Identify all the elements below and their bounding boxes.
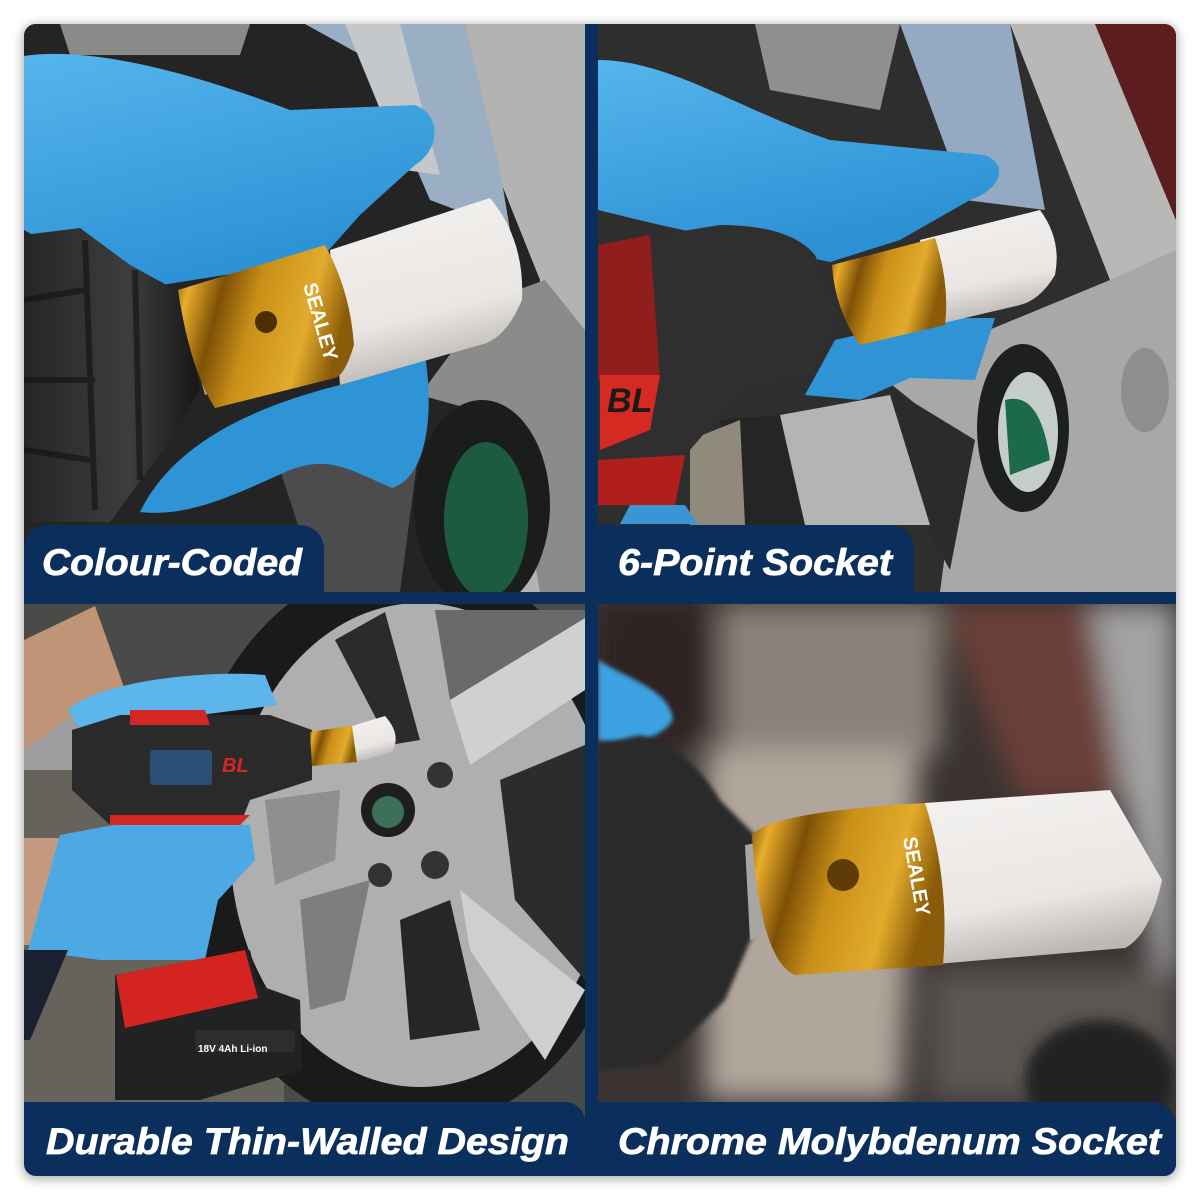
socket xyxy=(752,803,945,975)
label text: durable thin-walled design: Durable Thin-Walled Design xyxy=(46,1121,569,1162)
label tab: chrome molybdenum socket xyxy=(598,1102,1176,1176)
label tab: colour-coded xyxy=(24,525,324,592)
label text: colour-coded: Colour-Coded xyxy=(42,542,303,583)
socket xyxy=(178,245,354,408)
panel: chrome molybdenum photo xyxy=(598,604,1176,1140)
panel: colour-coded photo: SEALEY xyxy=(298,280,342,364)
panel: durable photo: BL xyxy=(222,755,249,777)
panel: durable photo xyxy=(24,604,585,1122)
panel: durable photo: 18V 4Ah Li-ion xyxy=(198,1044,267,1055)
label text: chrome molybdenum socket: Chrome Molybdenum Socket xyxy=(618,1121,1163,1162)
panel: chrome molybdenum photo: SEALEY xyxy=(898,835,934,918)
label tab: 6-point socket xyxy=(598,525,914,592)
panel: colour-coded photo xyxy=(24,24,585,610)
socket xyxy=(832,238,946,345)
panel: 6-point socket photo xyxy=(598,24,1176,592)
label tab: durable thin-walled design xyxy=(24,1102,585,1176)
panel: 6-point socket photo: BL xyxy=(607,382,652,420)
label text: 6-point socket: 6-Point Socket xyxy=(618,542,894,583)
